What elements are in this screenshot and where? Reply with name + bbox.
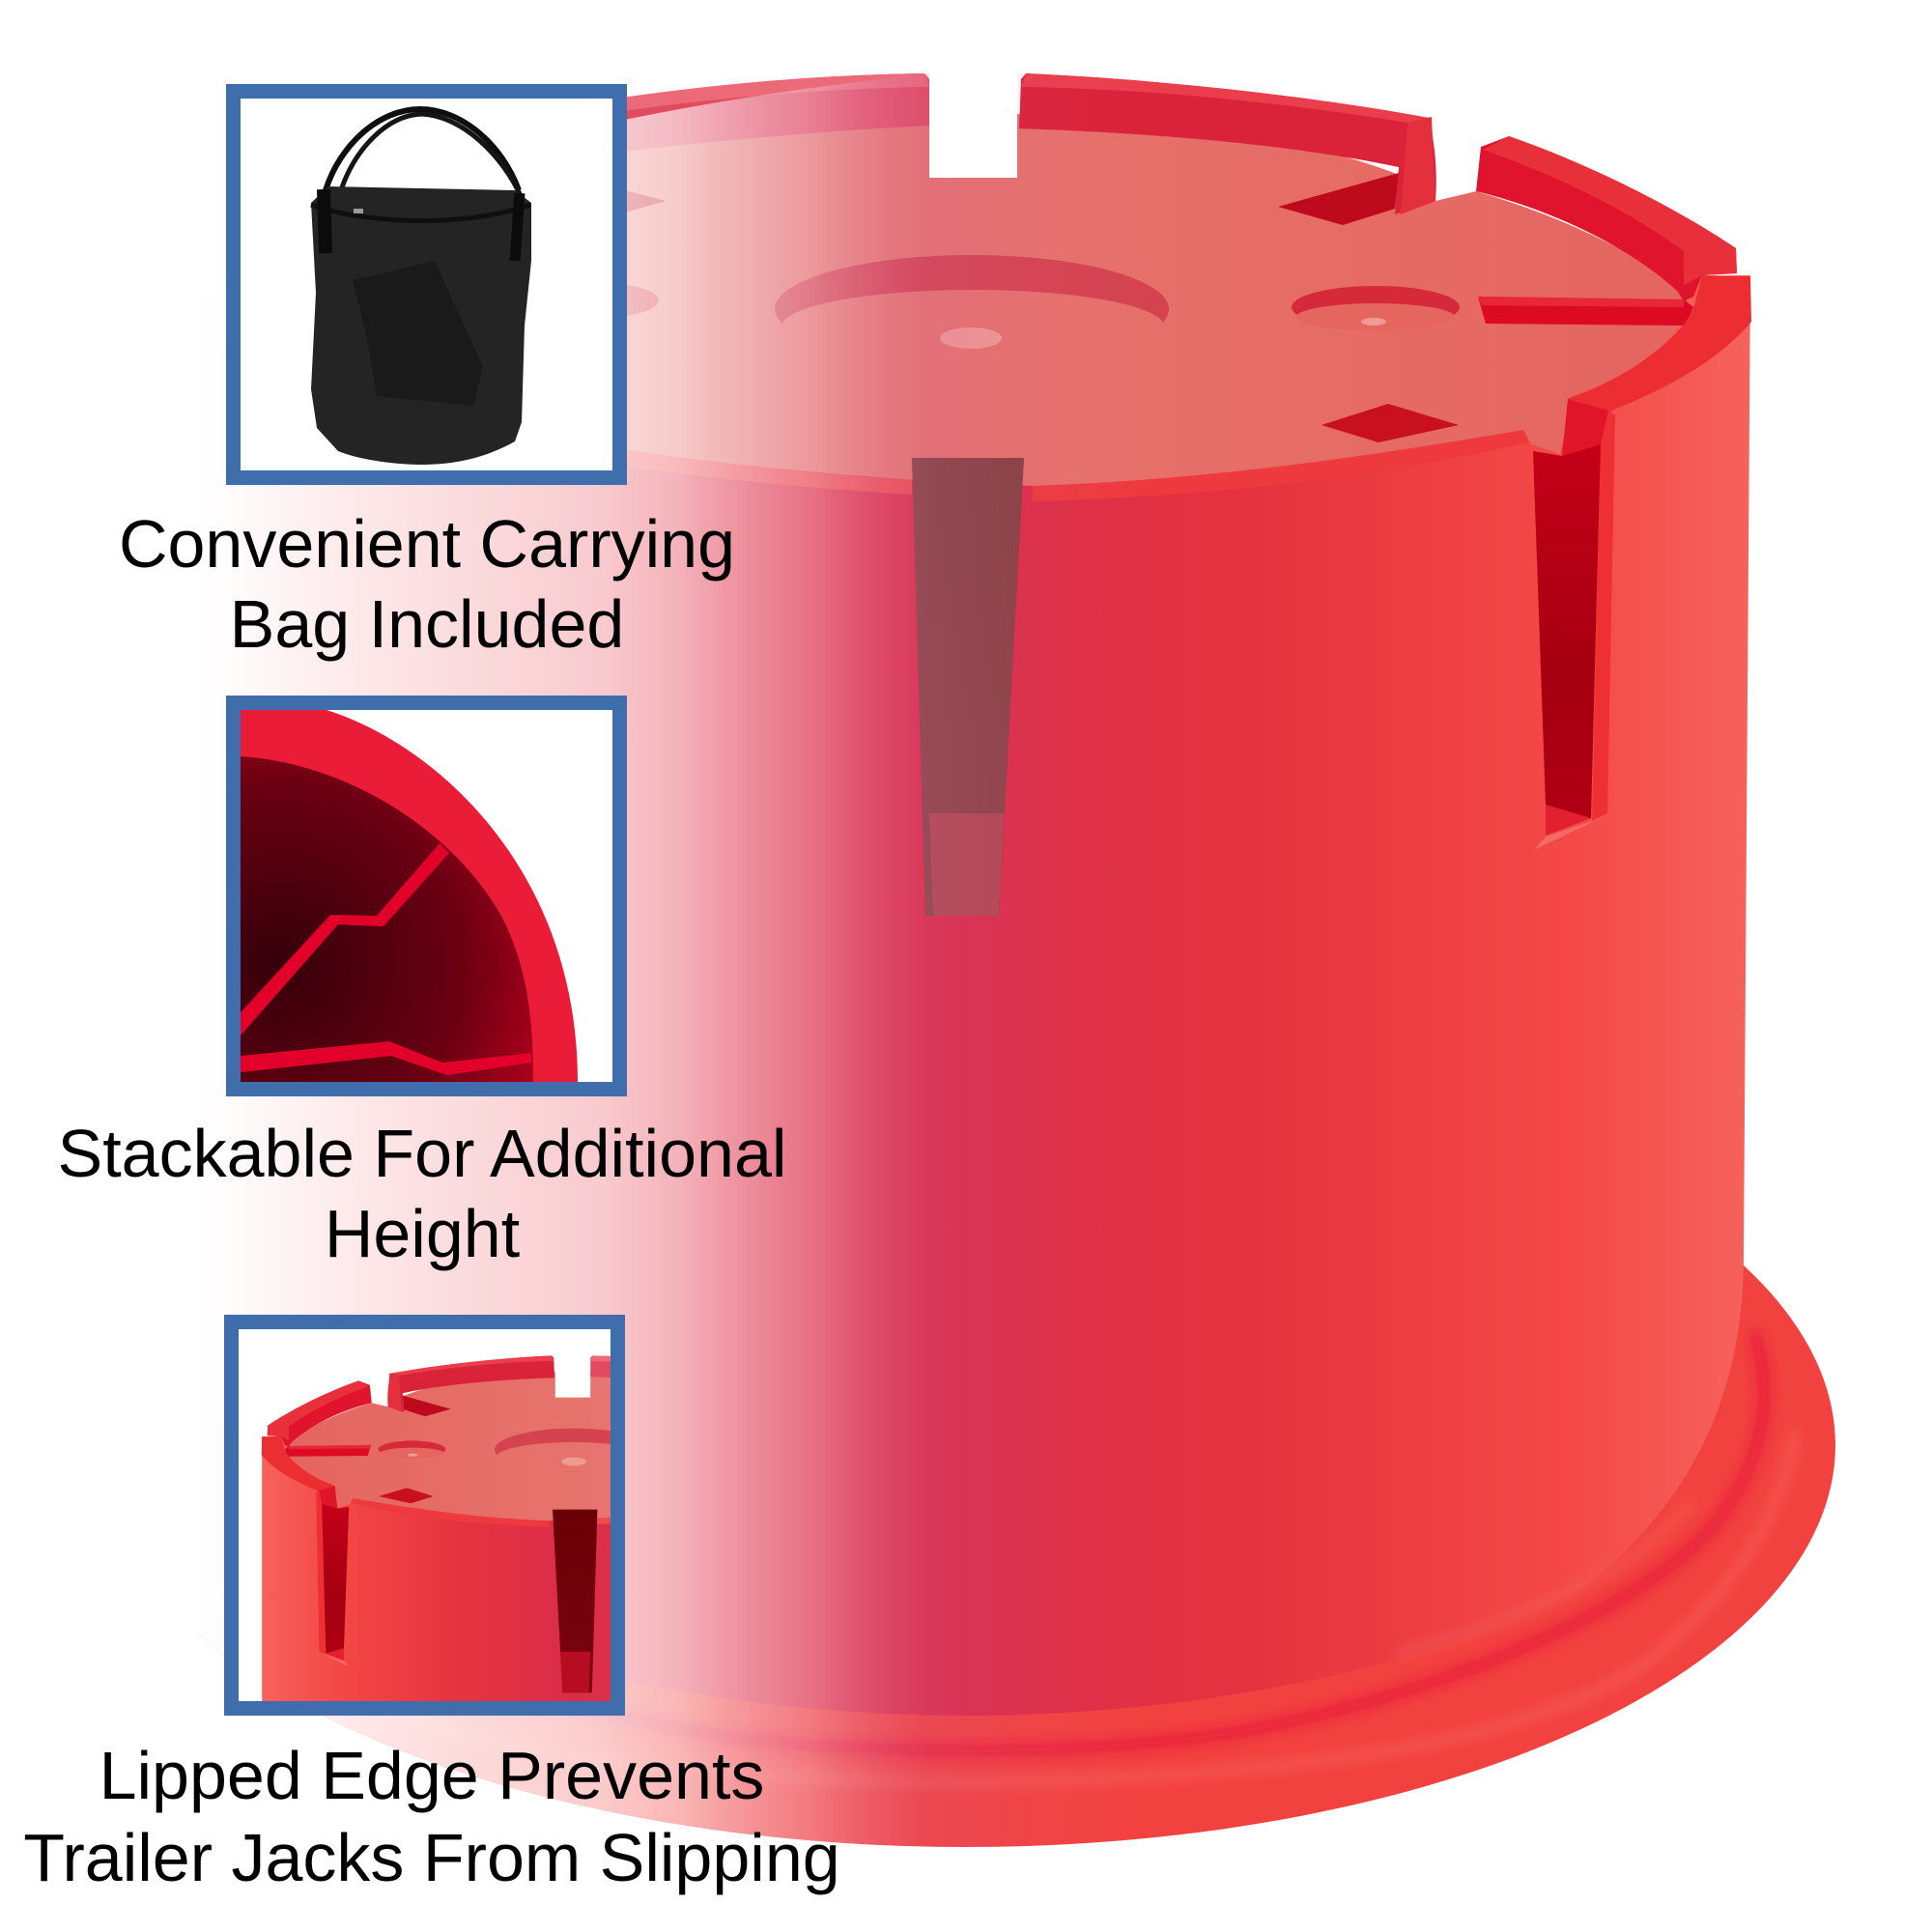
body lower highlight [1397,1499,1692,1654]
stacking interior view [241,710,578,1082]
caption: stackable [58,1116,786,1271]
caption: carrying bag [119,506,735,662]
back lip segment right [1476,136,1737,301]
cylinder body [188,275,1750,1716]
caption: stackable: Height [325,1196,520,1271]
back lip segment middle [1019,73,1436,214]
front notch floor [929,813,1005,916]
small circular recess [1292,286,1460,328]
panel: lipped edge [224,1315,625,1716]
left small recess [539,283,659,318]
front notch interior [912,458,1024,916]
diamond hole front [1321,404,1459,442]
notch floor [1546,805,1591,836]
rectangular slot in top face [1478,297,1693,326]
caption: stackable: Stackable For Additional [58,1116,786,1191]
flange outer light band [137,1430,1795,1783]
flange groove [168,1332,1764,1750]
right notch interior [1533,444,1601,818]
icon: black carrying bag [311,109,531,465]
back lip segment left [290,73,929,203]
panel: stackable [234,703,620,1090]
front rim lip [1033,430,1528,501]
diamond hole back left [541,184,666,220]
caption: lipped edge [23,1738,840,1895]
haze over front notch [912,458,1024,916]
caption: lipped edge: Lipped Edge Prevents [99,1738,764,1813]
caption: lipped edge: Trailer Jacks From Slipping [23,1820,840,1895]
mini product view [261,1355,611,1701]
product upper section [184,73,1751,916]
caption: carrying bag: Convenient Carrying [119,506,735,582]
panel: carrying bag [234,91,620,477]
notch upper wall [1562,399,1608,456]
top face [184,114,1693,486]
white margin covering faded product edge [0,0,197,1932]
diamond hole back right [1278,173,1399,225]
white fade over product [197,73,1028,1847]
caption: carrying bag: Bag Included [230,586,624,662]
notch right wall [1592,411,1615,821]
right rim segment [1567,275,1751,415]
large circular recess [775,255,1169,363]
base flange [97,1043,1835,1847]
